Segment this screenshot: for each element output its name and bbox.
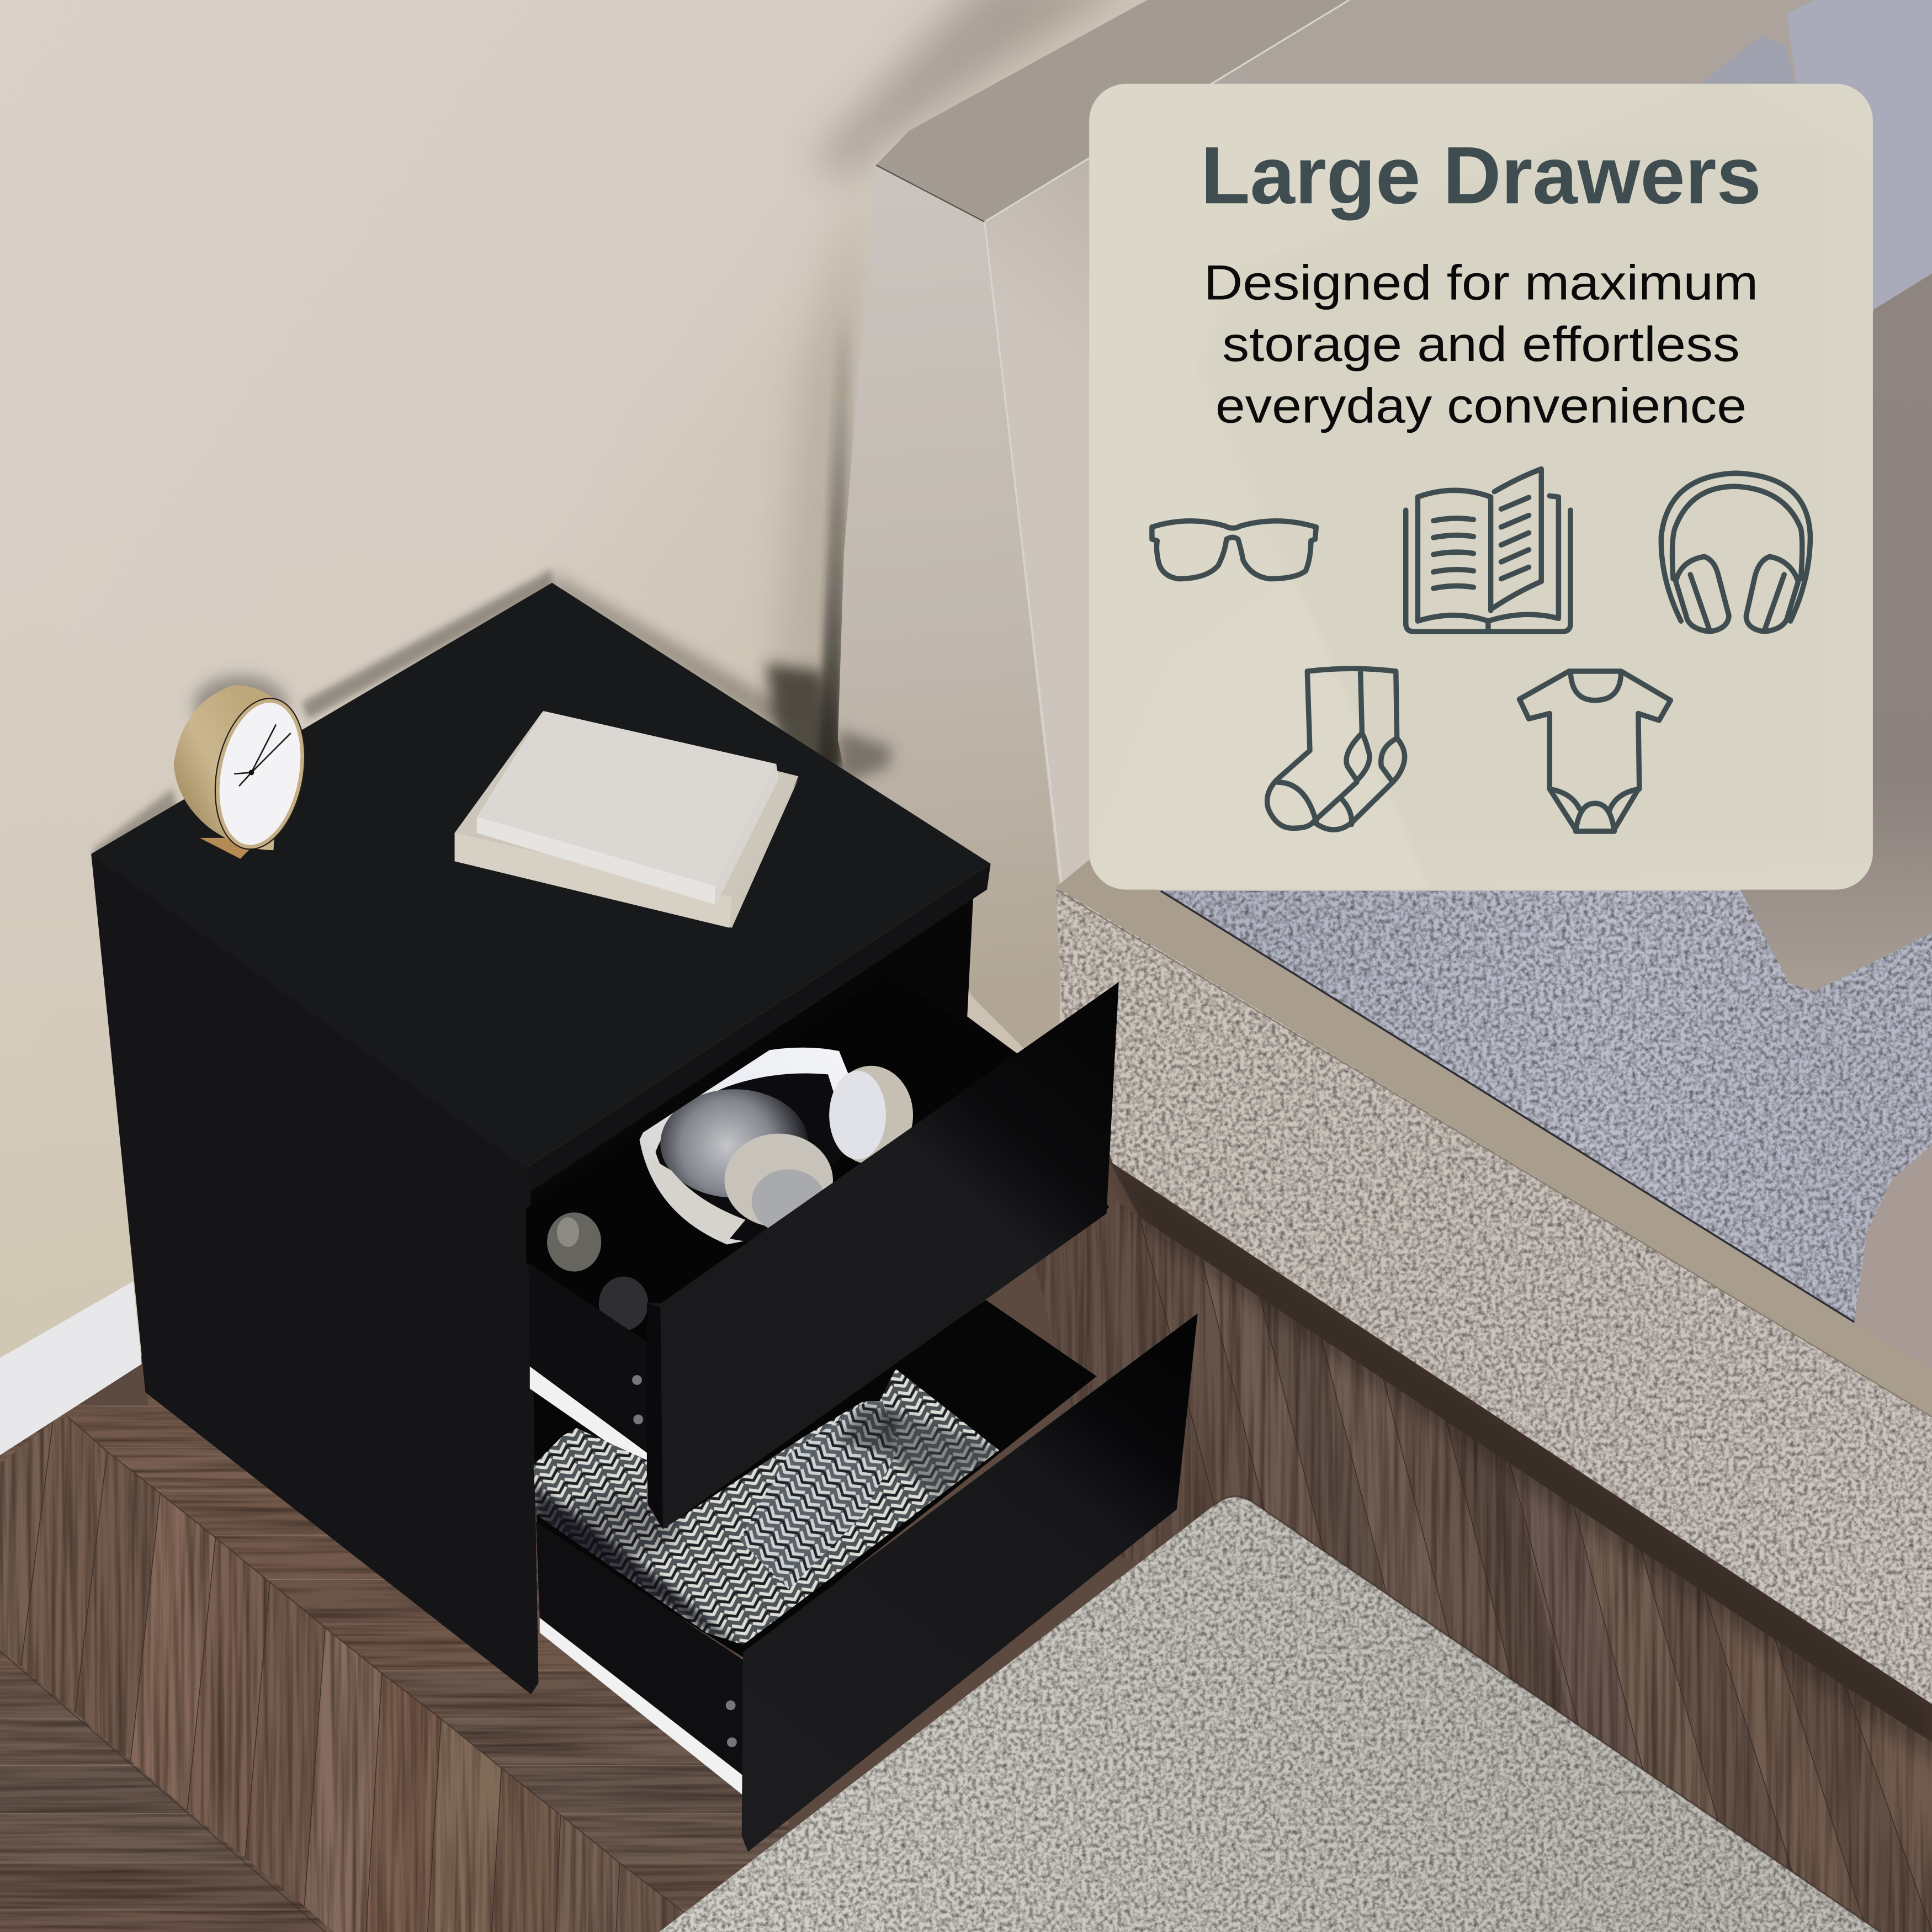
pillows	[1703, 0, 1932, 992]
panel faint scene behind	[1089, 74, 1873, 890]
herringbone wood floor	[0, 1109, 1932, 1932]
headboard	[838, 0, 1848, 1072]
lower drawer	[518, 1313, 1198, 1852]
upper drawer screws	[632, 1375, 643, 1424]
cabinet left side	[91, 854, 538, 1694]
rug	[659, 1496, 1880, 1932]
description	[1204, 254, 1758, 433]
lower drawer runner	[540, 1618, 743, 1795]
cabinet top	[91, 583, 991, 1168]
knitted blanket	[533, 1369, 999, 1645]
title: Large Drawers	[1201, 130, 1761, 221]
upper drawer front	[647, 982, 1119, 1529]
icon: open book	[1406, 469, 1570, 631]
lower drawer front	[742, 1313, 1198, 1852]
icons	[1152, 469, 1810, 831]
clock	[174, 675, 317, 859]
top front lip	[526, 864, 991, 1193]
description: everyday convenience	[1216, 378, 1747, 433]
bed rail and mattress	[1056, 859, 1932, 1704]
sunglasses in drawer	[547, 1212, 601, 1272]
cabinet interior upper	[526, 893, 1109, 1529]
nightstand cabinet	[91, 583, 1109, 1694]
headphones	[547, 1048, 913, 1331]
panel: large drawers	[1089, 74, 1873, 890]
description: Designed for maximum	[1204, 254, 1758, 310]
lower drawer side	[536, 1522, 743, 1776]
icon: socks	[1267, 668, 1405, 830]
icon: glasses	[1152, 521, 1316, 579]
upper drawer	[526, 973, 1119, 1529]
icon: baby bodysuit	[1520, 671, 1670, 831]
stacked books	[455, 711, 798, 928]
upper drawer runner	[530, 1366, 647, 1470]
baseboard	[0, 1281, 142, 1455]
panel background	[1089, 84, 1873, 890]
cabinet interior lower	[527, 1300, 1097, 1657]
upper drawer side	[529, 1263, 647, 1450]
wall	[0, 0, 1932, 1479]
upper drawer interior	[526, 973, 1029, 1342]
icon: headphones	[1661, 473, 1810, 631]
lower drawer screws	[726, 1700, 737, 1747]
description: storage and effortless	[1222, 316, 1740, 371]
